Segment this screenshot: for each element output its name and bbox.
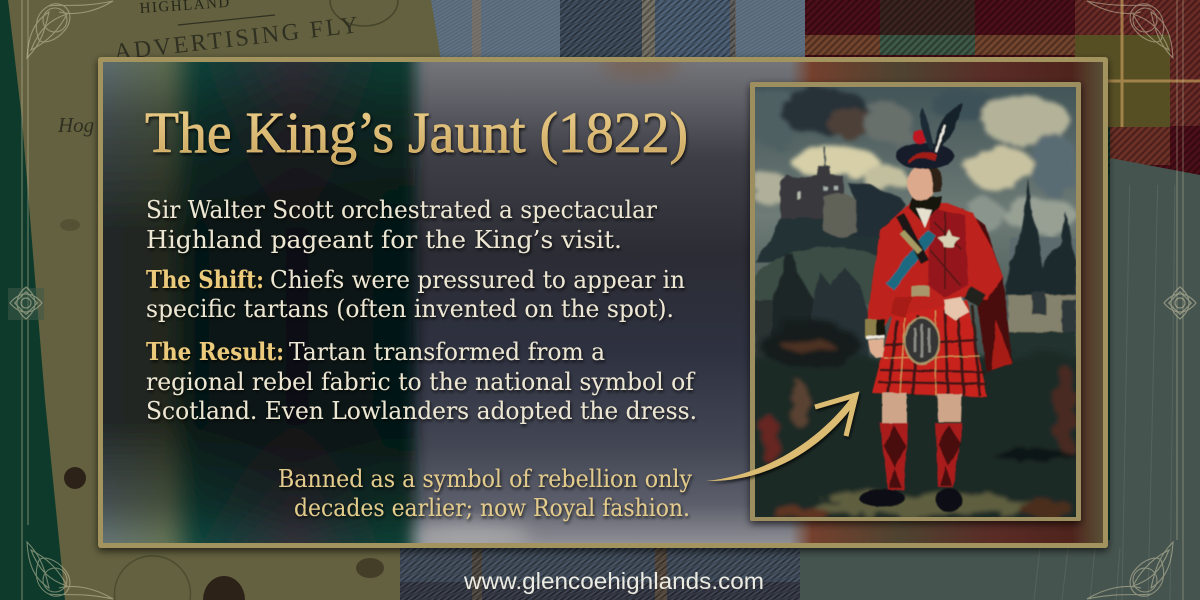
ink stains — [60, 219, 384, 600]
black cross belt with gold plates — [900, 215, 925, 262]
head and hair — [907, 165, 935, 201]
flyer script: Hog — [57, 113, 94, 137]
text block: introduction: Sir Walter Scott orchestrated a spectacular — [146, 196, 657, 224]
background: aged advertising flyer paper — [8, 0, 441, 600]
castle on rock — [755, 147, 906, 305]
callout: banned note — [278, 465, 692, 522]
decorative border: right celtic corners and knot — [1087, 0, 1196, 600]
background: grey-green document bottom right — [800, 158, 1200, 600]
text block: the result: Tartan transformed from a — [289, 338, 605, 366]
belt buckle — [911, 286, 929, 296]
figure: the King in Highland dress — [859, 103, 1012, 512]
postmark top — [330, 0, 398, 26]
blue sash — [890, 233, 932, 287]
callout: banned note: Banned as a symbol of rebellion only — [278, 465, 692, 493]
background: blue-grey tartan swatch bottom — [400, 545, 802, 600]
text block: the shift: The Shift: — [146, 265, 264, 294]
text block: the shift: specific tartans (often invented on the spot). — [146, 295, 674, 323]
red jacket — [867, 203, 1003, 330]
title: The King’s Jaunt (1822) — [145, 100, 688, 165]
text block: the shift — [146, 265, 685, 323]
painted storm clouds — [749, 87, 1079, 233]
buckled shoes — [859, 489, 905, 507]
legs — [882, 393, 962, 424]
callout: banned note: decades earlier; now Royal fashion. — [294, 494, 690, 522]
foreground ground — [755, 318, 1076, 517]
text block: the result: regional rebel fabric to the national symbol of — [146, 368, 696, 396]
text block: the shift: Chiefs were pressured to appear in — [270, 266, 685, 294]
sporran — [905, 318, 939, 364]
argyle socks — [880, 423, 908, 490]
neck and cravat — [909, 196, 942, 222]
star badge — [938, 229, 960, 247]
arrow: from note to the King's kilt — [706, 395, 856, 481]
background: red and gold tartan swatch — [805, 0, 1200, 185]
text block: the result — [146, 337, 697, 425]
postmark bottom — [114, 556, 191, 600]
bonnet with pompom and feathers — [896, 143, 954, 169]
text block: the result: The Result: — [146, 337, 284, 366]
text block: introduction: Highland pageant for the King’s visit. — [146, 226, 622, 254]
flyer title text: ADVERTISING FLY — [113, 12, 362, 66]
website url: www.glencoehighlands.com — [463, 568, 764, 594]
portrait painting of King George IV — [735, 82, 1095, 530]
hands and cuffs — [944, 297, 969, 320]
red kilt with tartan — [872, 300, 987, 397]
background: blue-grey tartan swatch top — [430, 0, 806, 60]
decorative border: left celtic corners and knot — [8, 0, 113, 600]
town silhouette — [755, 178, 1076, 360]
text block: introduction — [146, 196, 657, 254]
text block: the result: Scotland. Even Lowlanders adopted the dress. — [146, 397, 697, 425]
panel frosted backdrop — [103, 62, 1103, 543]
plaid cape — [962, 208, 1012, 372]
panel: frosted text card — [70, 30, 1108, 575]
